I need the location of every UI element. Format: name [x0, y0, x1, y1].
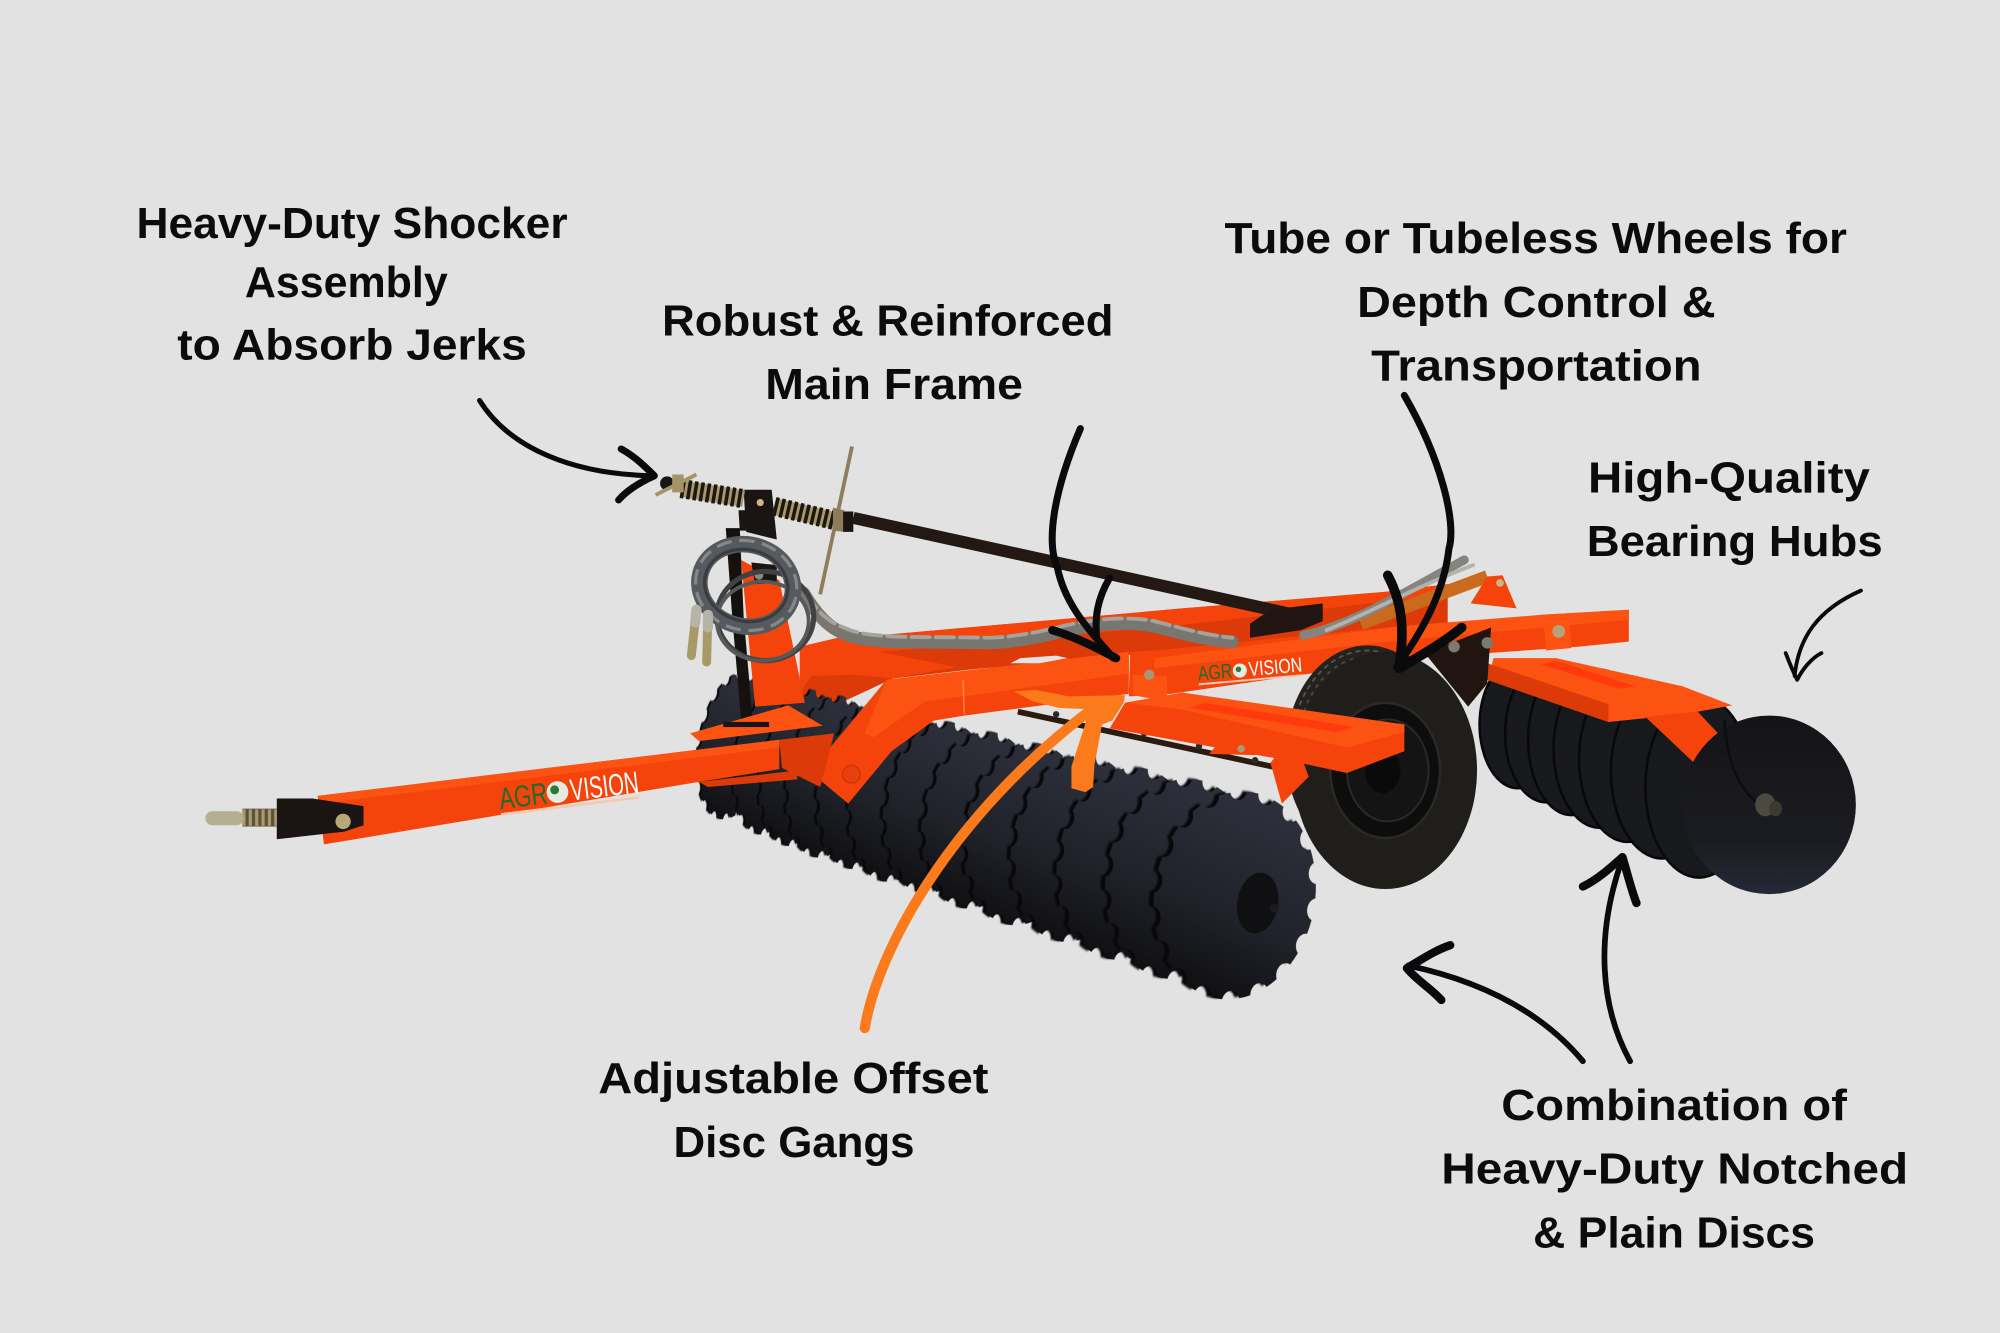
frame bolt block [1133, 675, 1167, 702]
label: disc gangs: Disc Gangs [673, 1118, 915, 1167]
label: wheels: Depth Control & [1357, 278, 1716, 327]
rear frame rail [800, 584, 1448, 714]
hitch clevis [205, 798, 364, 839]
label: main frame: Robust & Reinforced [662, 296, 1114, 345]
hub plate bracket [1425, 628, 1491, 707]
coiled hydraulic hoses [685, 529, 814, 661]
arrow: notched discs [1407, 945, 1583, 1061]
rear gang brace [1645, 712, 1721, 763]
hose bundle [804, 560, 1473, 643]
arrow: wheels [1388, 395, 1462, 668]
label: wheels [1224, 214, 1847, 391]
rear gang beam [1487, 658, 1732, 722]
near gang beam [1110, 693, 1404, 804]
label: disc combination: Combination of [1501, 1081, 1847, 1130]
label: bearing hubs [1587, 453, 1883, 566]
label: bearing hubs: High-Quality [1588, 453, 1870, 502]
arrow: bearing hubs [1786, 591, 1861, 680]
hose couplers [691, 610, 708, 662]
logo: drawbar: AGR [497, 777, 549, 816]
icon: front disc hub [1232, 869, 1283, 937]
label: disc gangs: Adjustable Offset [598, 1054, 989, 1103]
arrow: offset disc gangs (orange) [865, 690, 1125, 1028]
main frame diagonal [810, 652, 1167, 804]
shocker spring [656, 474, 853, 532]
mast [690, 490, 823, 741]
thin lever [820, 446, 852, 594]
top rod [853, 518, 1306, 617]
label: disc gangs [598, 1054, 989, 1167]
rod end bracket [1250, 603, 1323, 638]
logo: cross beam: VISION [1248, 655, 1303, 681]
front cross beam [1129, 610, 1629, 707]
label: shocker assembly: Assembly [245, 258, 448, 307]
label: shocker assembly: Heavy-Duty Shocker [136, 199, 568, 248]
label: bearing hubs: Bearing Hubs [1587, 517, 1883, 566]
disc harrow machine [205, 446, 1856, 1012]
front notched disc gang [687, 667, 1332, 1012]
label: wheels: Tube or Tubeless Wheels for [1224, 214, 1847, 263]
arrow: main frame [1052, 429, 1116, 658]
arrow: plain discs [1583, 857, 1636, 1061]
label: disc combination: & Plain Discs [1533, 1208, 1815, 1257]
label: disc combination: Heavy-Duty Notched [1441, 1145, 1908, 1194]
front plain disc [1682, 716, 1856, 894]
label: disc combination [1441, 1081, 1908, 1257]
hitch block [779, 733, 834, 787]
rear plain disc gang [1480, 661, 1753, 878]
logo: drawbar: VISION [568, 765, 641, 808]
label: shocker assembly [136, 199, 568, 370]
label: main frame [662, 296, 1114, 409]
drawbar [318, 740, 797, 844]
logo: cross beam [1197, 655, 1303, 686]
arrow: shocker [480, 401, 654, 500]
hydraulic cylinder [1361, 575, 1517, 624]
label: main frame: Main Frame [765, 360, 1023, 409]
logo: drawbar [497, 765, 641, 816]
logo: cross beam: AGR [1197, 661, 1233, 686]
transport wheel [1286, 645, 1477, 889]
label: wheels: Transportation [1371, 342, 1702, 391]
icon: rear disc hub [1755, 793, 1782, 816]
gang scraper bar [1018, 711, 1278, 768]
label: shocker assembly: to Absorb Jerks [177, 321, 527, 370]
